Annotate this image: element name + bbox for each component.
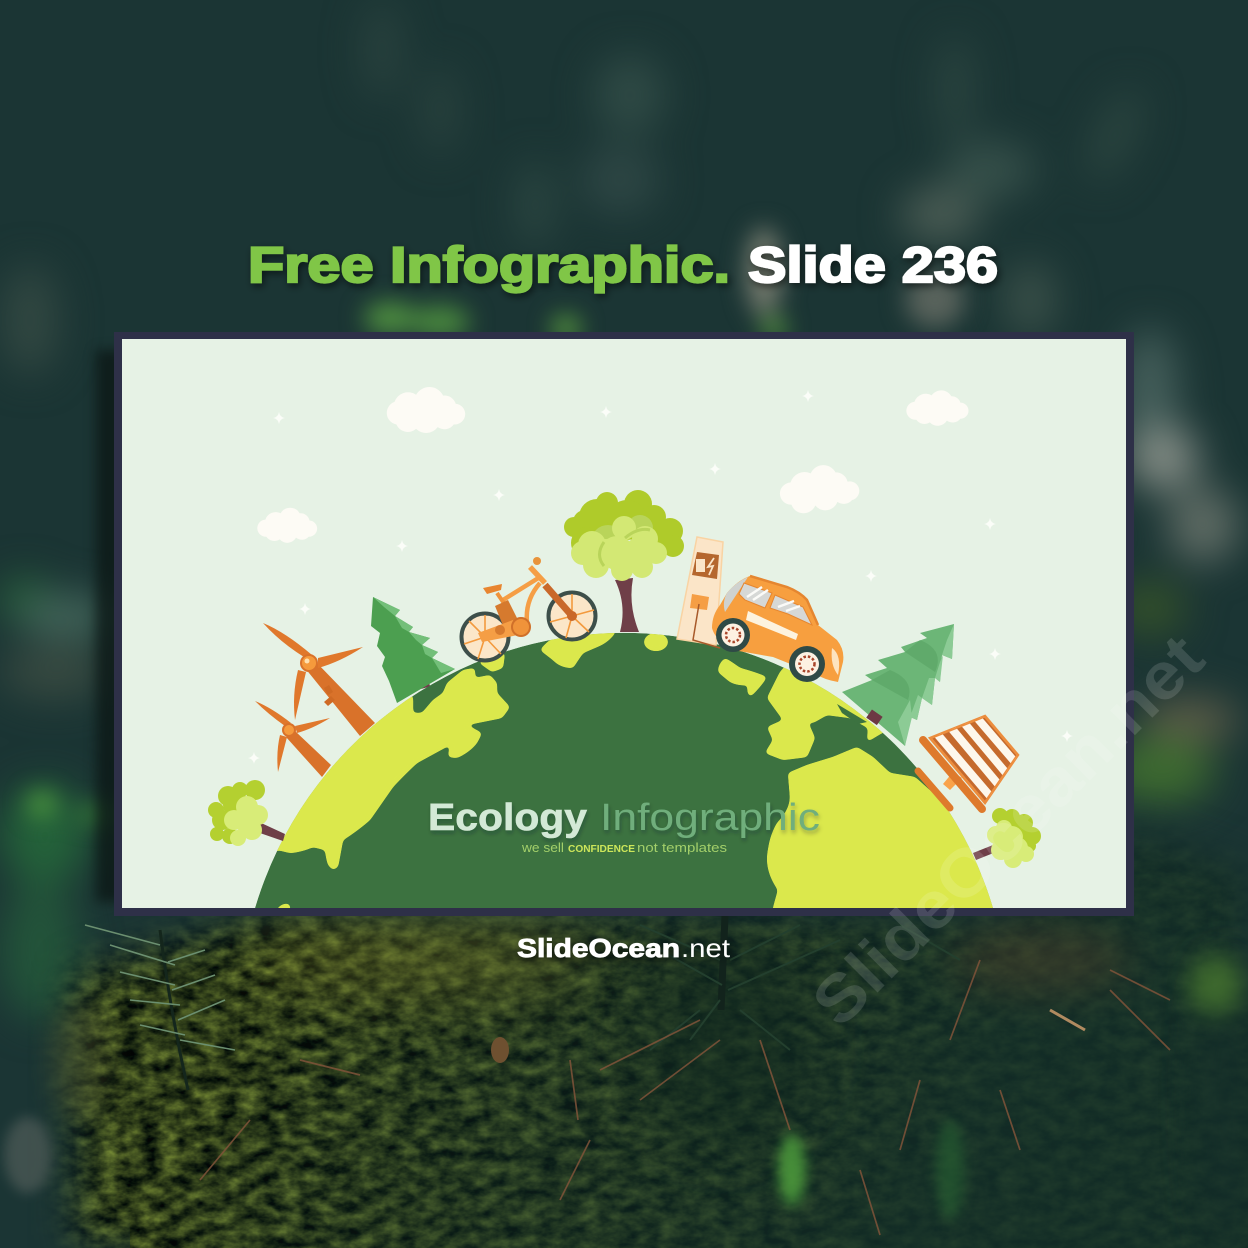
land: left continent <box>276 668 509 869</box>
brand: suffix: .net <box>681 933 731 963</box>
dark strait <box>837 704 867 724</box>
cloud 1 <box>387 387 465 433</box>
clouds <box>257 387 969 543</box>
title <box>248 237 998 293</box>
icon: left pine tree <box>371 597 455 703</box>
slide frame <box>114 332 1134 916</box>
icon: left small tree <box>208 780 285 846</box>
window rear <box>770 595 812 625</box>
tagline: not templates <box>637 840 728 855</box>
white side stripe <box>746 611 798 640</box>
moss foreground texture <box>55 845 1248 1248</box>
cloud 2 <box>906 390 968 426</box>
light crown <box>571 516 667 581</box>
front wheel <box>789 646 825 682</box>
front wheel <box>548 592 596 640</box>
land masses <box>276 633 993 908</box>
cloud 3 <box>780 465 859 513</box>
crown shadow <box>595 515 653 540</box>
heading word: Infographic: Infographic <box>600 797 820 839</box>
car body <box>712 576 843 682</box>
watermark: SlideOcean.net <box>798 620 1218 1040</box>
heading: Ecology Infographic <box>428 797 820 855</box>
land: large east continent <box>767 748 993 908</box>
moss light and shade patches <box>4 918 1248 1248</box>
tagline: we sell <box>521 840 564 855</box>
window front <box>739 583 772 608</box>
stars <box>248 390 1073 764</box>
icon: charging station <box>677 537 723 648</box>
rear glass <box>724 577 748 612</box>
land: patch beneath bicycle <box>478 652 505 672</box>
title: green part: Free Infographic. <box>248 237 730 293</box>
tagline <box>522 842 726 854</box>
rear wheel <box>462 614 508 660</box>
icon: electric car <box>712 576 843 682</box>
land: north patch <box>542 633 615 668</box>
icon: big tree <box>564 490 684 632</box>
cloud 4 <box>257 508 317 543</box>
brand line <box>517 933 731 963</box>
headlight <box>832 648 839 675</box>
globe <box>255 632 993 908</box>
needles and twigs <box>85 916 1170 1235</box>
land: northeast continent <box>766 668 883 760</box>
icon: bicycle <box>462 557 596 660</box>
slide frame shadow <box>96 350 124 902</box>
trunk <box>615 578 639 632</box>
icon: large wind turbine <box>263 623 375 736</box>
land: small round patch <box>644 633 668 651</box>
icon: right pine tree <box>842 624 954 746</box>
land: bottom left sliver <box>278 904 290 908</box>
land: central patch <box>718 658 767 697</box>
title: white part: Slide 236 <box>748 237 998 293</box>
dark crown <box>564 490 684 559</box>
heading word: Ecology: Ecology <box>428 797 587 839</box>
panel: slide <box>122 339 1126 930</box>
tagline emphasis: CONFIDENCE <box>568 843 635 855</box>
battery sign <box>692 552 719 579</box>
icon: solar panel <box>918 716 1018 809</box>
icon: right small tree <box>973 808 1041 868</box>
brand: bold name: SlideOcean <box>517 933 680 963</box>
icon: small wind turbine <box>255 701 331 777</box>
rear wheel <box>716 618 750 652</box>
frame <box>503 577 540 622</box>
